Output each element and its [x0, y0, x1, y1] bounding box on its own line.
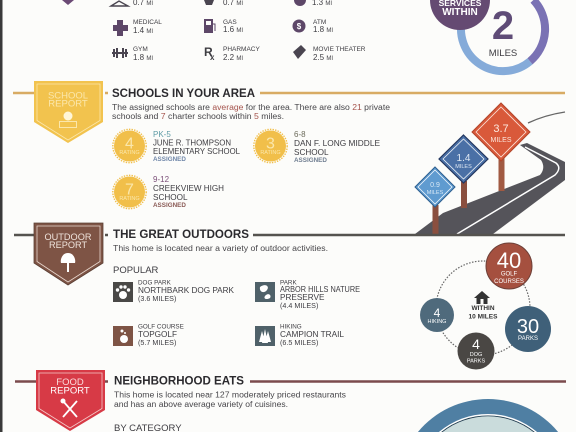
text: June R. Thompson school: PK-5 — [153, 130, 171, 139]
panel: nearby services list — [111, 0, 366, 62]
text: Creekview school: ASSIGNED — [153, 202, 186, 209]
service: gas — [204, 19, 243, 34]
label: within 10 miles: 10 MILES — [469, 314, 498, 320]
service: third item — [294, 0, 332, 7]
seal: June R. Thompson rating 4 — [113, 129, 146, 163]
item: Topgolf — [113, 324, 184, 347]
service: gym: 1.8 MI — [133, 53, 153, 62]
heading: neighborhood eats: NEIGHBORHOOD EATS — [114, 374, 244, 388]
item: Topgolf: (5.7 MILES) — [138, 338, 176, 347]
label: within 10 miles: WITHIN — [471, 305, 495, 312]
chart: services within 2 miles ring: WITHIN — [442, 7, 478, 18]
service: ATM: ATM — [313, 19, 326, 26]
text: June R. Thompson school — [153, 130, 240, 163]
service: medical: MEDICAL — [133, 19, 162, 26]
service: pharmacy: 2.2 MI — [223, 53, 243, 62]
chart: services within 2 miles ring: MILES — [489, 48, 517, 59]
bubble: 40 golf courses: 40 — [497, 248, 521, 273]
badge: outdoor report: OUTDOOR — [45, 232, 92, 242]
bubble: 4 dog parks — [458, 332, 494, 370]
item: Campion Trail — [255, 324, 344, 347]
badge: school report: SCHOOL — [48, 90, 88, 102]
seal: Dan F. Long rating 3: RATING — [260, 150, 281, 156]
divider: food section — [15, 380, 566, 383]
text: outdoor summary: This home is located near a variety of outdoor activities. — [113, 244, 328, 253]
service: medical — [113, 19, 162, 36]
service: pharmacy: x — [210, 53, 215, 62]
item: Topgolf: TOPGOLF — [138, 330, 177, 339]
bubble: 30 parks: PARKS — [518, 336, 538, 342]
sign post: 0.9 miles: 0.9 — [430, 182, 440, 189]
service: gym: GYM — [133, 46, 148, 53]
heading: outdoors: THE GREAT OUTDOORS — [113, 227, 249, 241]
text: June R. Thompson school: ELEMENTARY SCHOOL — [153, 147, 240, 156]
text: food summary: and has an above average variety of cuisines. — [114, 400, 288, 409]
badge: school report — [34, 81, 103, 143]
badge: food report: REPORT — [50, 386, 90, 396]
service: pharmacy — [204, 45, 261, 62]
seal: Dan F. Long rating 3: 3 — [266, 136, 275, 152]
text: Creekview school — [153, 175, 224, 209]
service: grocery — [204, 0, 243, 7]
service: movie theater: 2.5 MI — [313, 53, 333, 62]
bubble: 40 golf courses: GOLF — [501, 272, 517, 278]
item: Northbark Dog Park — [113, 280, 235, 303]
item: Northbark Dog Park: NORTHBARK DOG PARK — [138, 286, 235, 295]
service: shopping — [111, 0, 153, 7]
service: movie theater — [293, 45, 366, 62]
item: Northbark Dog Park: (3.6 MILES) — [138, 294, 176, 303]
bubble: 30 parks: 30 — [517, 316, 539, 338]
item: Arbor Hills Nature Preserve: ARBOR HILLS NATURE — [280, 285, 360, 294]
item: Topgolf: GOLF COURSE — [138, 324, 184, 330]
sign post: 1.4 miles: MILES — [455, 164, 472, 170]
seal: June R. Thompson rating 4: 4 — [125, 136, 134, 152]
item: Arbor Hills Nature Preserve: PARK — [280, 280, 297, 286]
service: gas: 1.6 MI — [223, 25, 243, 34]
seal: Creekview rating 7 — [113, 175, 146, 209]
service: medical: 1.4 MI — [133, 26, 153, 35]
item: Campion Trail: HIKING — [280, 324, 302, 330]
bubble: 4 hiking: HIKING — [428, 319, 446, 325]
chart: services within 2 miles ring: 2 — [492, 4, 514, 48]
sign post: 3.7 miles — [472, 103, 530, 191]
badge: food report: FOOD — [56, 377, 84, 388]
text: Creekview school: CREEKVIEW HIGH — [153, 184, 224, 193]
service: pharmacy: R — [204, 45, 213, 59]
sign post: 1.4 miles — [439, 135, 488, 208]
icon: house — [474, 291, 490, 304]
badge: outdoor report: REPORT — [49, 240, 87, 250]
bubble: 4 dog parks: PARKS — [467, 358, 485, 364]
item: Northbark Dog Park: DOG PARK — [138, 280, 172, 286]
service: gas: GAS — [223, 19, 237, 26]
service: ATM — [292, 19, 333, 34]
service: pharmacy: PHARMACY — [223, 46, 261, 53]
bubble: 4 dog parks: DOG — [470, 352, 482, 358]
bubble: 4 hiking — [420, 298, 454, 332]
bubble: 30 parks — [505, 306, 551, 352]
bubble: 40 golf courses — [486, 243, 532, 289]
text: Creekview school: SCHOOL — [153, 193, 188, 202]
heading: schools: SCHOOLS IN YOUR AREA — [112, 86, 255, 100]
sign post: 0.9 miles: MILES — [427, 190, 444, 196]
item: Arbor Hills Nature Preserve: (4.4 MILES) — [280, 301, 318, 310]
seal: Dan F. Long rating 3 — [254, 129, 287, 163]
seal: June R. Thompson rating 4: RATING — [119, 150, 140, 156]
badge: food report — [36, 370, 105, 431]
text: Dan F. Long school — [294, 130, 381, 164]
bubble: 4 hiking: 4 — [434, 306, 441, 320]
service: gym — [112, 46, 153, 62]
sign post: 1.4 miles: 1.4 — [457, 153, 471, 164]
divider: school section — [13, 92, 565, 94]
service: movie theater: MOVIE THEATER — [313, 46, 366, 53]
text: Creekview school: 9-12 — [153, 175, 170, 184]
text: Dan F. Long school: DAN F. LONG MIDDLE — [294, 139, 381, 148]
sign post: 3.7 miles: MILES — [490, 137, 512, 144]
text: food summary: This home is located near 127 moderately priced restaurants — [114, 390, 346, 400]
text: June R. Thompson school: ASSIGNED — [153, 156, 186, 163]
item: Campion Trail: CAMPION TRAIL — [280, 330, 344, 339]
text: Dan F. Long school: ASSIGNED — [294, 157, 327, 164]
heading: popular: POPULAR — [113, 265, 159, 276]
chart: activities within 10 miles — [420, 243, 551, 370]
badge: outdoor report — [34, 223, 103, 285]
sign post: 0.9 miles — [415, 167, 455, 234]
badge: school report: REPORT — [48, 98, 88, 110]
seal: Creekview rating 7: 7 — [125, 182, 134, 198]
text: June R. Thompson school: JUNE R. THOMPSON — [153, 138, 231, 148]
chart: services within 2 miles ring — [430, 0, 545, 71]
sign post: 3.7 miles: 3.7 — [493, 123, 509, 135]
chart: plate graphic — [418, 399, 558, 432]
item: Arbor Hills Nature Preserve — [255, 280, 360, 310]
item: Campion Trail: (6.5 MILES) — [280, 338, 318, 347]
bubble: 40 golf courses: COURSES — [494, 279, 524, 285]
icon: partial purple marker — [62, 0, 74, 5]
text: school summary: schools and 7 charter schools within 5 miles. — [112, 112, 282, 121]
text: Dan F. Long school: SCHOOL — [294, 148, 329, 157]
seal: Creekview rating 7: RATING — [119, 196, 140, 202]
item: Arbor Hills Nature Preserve: PRESERVE — [280, 293, 325, 302]
service: ATM: 1.8 MI — [313, 25, 333, 34]
bubble: 4 dog parks: 4 — [472, 336, 480, 352]
text: school summary: The assigned schools are average for the area. There are also 21 private — [112, 103, 388, 112]
illustration: winding road with distance signs — [415, 103, 565, 234]
service: ATM: $ — [297, 22, 302, 31]
divider: outdoor section — [14, 234, 565, 236]
text: Dan F. Long school: 6-8 — [294, 130, 306, 139]
